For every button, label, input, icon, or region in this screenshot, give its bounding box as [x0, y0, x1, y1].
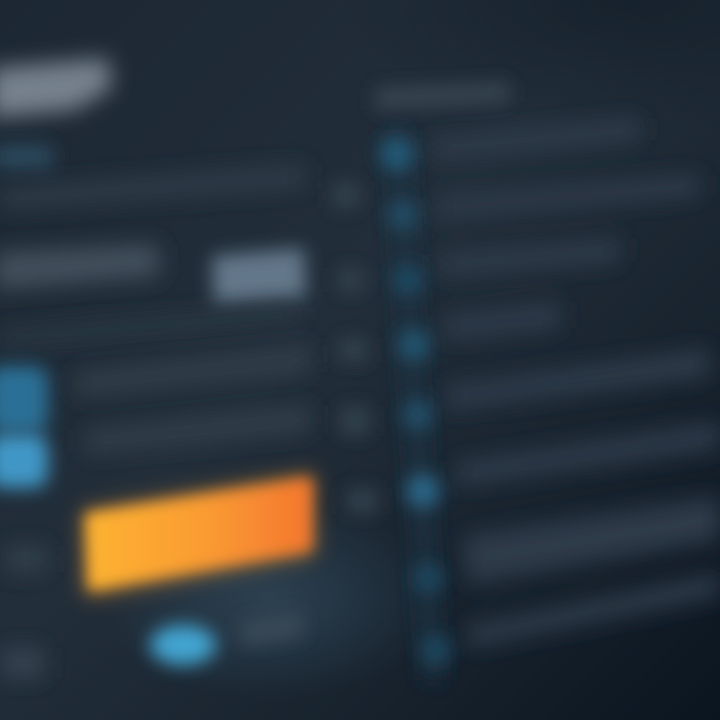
orange callout [82, 472, 315, 598]
background glow [100, 500, 440, 700]
subheading [0, 145, 53, 169]
button [212, 248, 306, 304]
orange glow [82, 472, 315, 598]
panel: right list [375, 82, 720, 680]
timeline line [388, 130, 442, 680]
small label [5, 546, 47, 572]
grey button [240, 612, 304, 646]
panel: bottom controls [2, 546, 304, 678]
panel: left column [0, 58, 306, 347]
label line [0, 244, 160, 290]
panel: blue bars [0, 345, 310, 488]
text line [85, 405, 310, 454]
blue bar lower [0, 434, 48, 488]
blue bar upper [0, 366, 48, 432]
text line [0, 164, 305, 210]
list lines [432, 118, 720, 648]
orange bar [86, 478, 311, 590]
cyan button [150, 625, 216, 665]
panel: middle markers [332, 182, 378, 514]
text line [0, 305, 300, 347]
text line [75, 345, 310, 397]
list heading [375, 82, 510, 110]
list bullets [380, 137, 451, 665]
small label [2, 648, 44, 678]
dark area at top right [340, 0, 720, 130]
heading [0, 58, 112, 118]
